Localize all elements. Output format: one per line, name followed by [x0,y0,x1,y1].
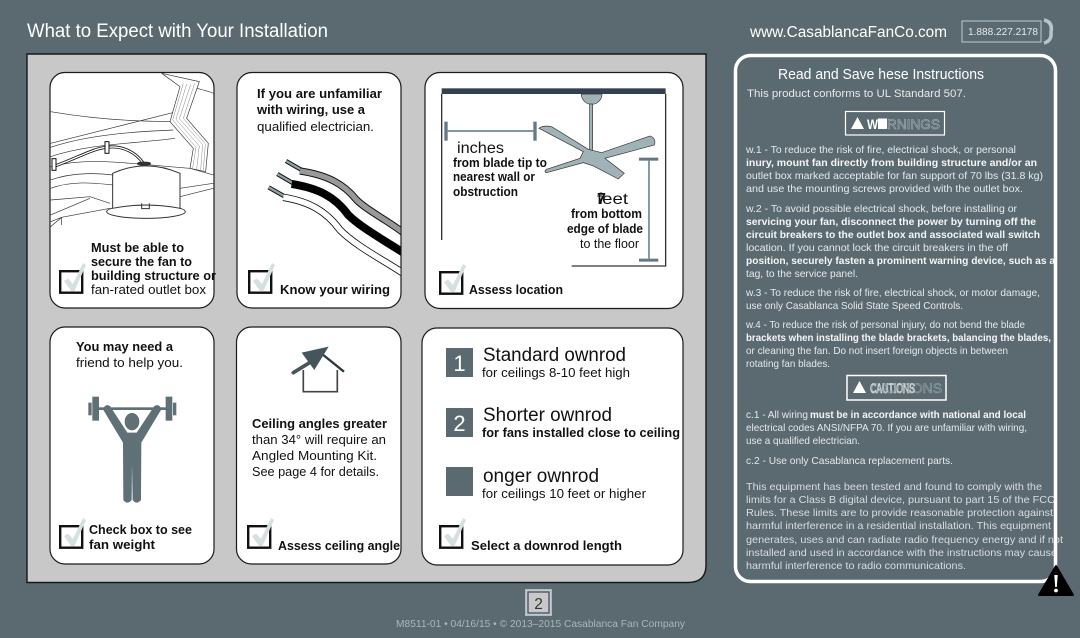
option 1: standard downrod: for ceilings 8-10 feet high [482,366,630,380]
text: may need a friend: friend to help you. [76,356,183,370]
text: inches clearance: obstruction [453,185,518,199]
caution c.1: must be in accordance with national and local [810,409,1026,421]
text: inches clearance [453,140,547,199]
phone number box [962,20,1051,43]
FCC notice [746,481,1063,572]
warning w.2: w.2 - To avoid possible electrical shock, before installing or [745,203,1018,215]
option 3: longer downrod: onger ownrod [483,466,599,487]
checkbox [248,518,274,548]
checkbox [249,263,275,293]
warning w.3 [745,287,1040,312]
text: feet clearance: edge of blade [567,222,643,236]
text: unfamiliar with wiring [256,87,382,134]
warning w.2: tag, to the service panel. [746,268,858,280]
text: ceiling angles: See page 4 for details. [252,465,379,479]
option 2: shorter downrod: 2 [453,411,466,436]
footer: M8511-01 • 04/16/15 • © 2013–2015 Casablanca Fan Company [396,618,686,630]
option 1: standard downrod [446,345,630,380]
option 2: shorter downrod: for fans installed close to ceiling [482,426,680,440]
panel: read and save instructions [736,56,1063,582]
option 3: longer downrod [446,466,646,501]
icon: warning triangle [1039,566,1073,595]
FCC notice: generates, uses and can radiate radio frequency energy and if not [746,534,1063,546]
checkbox [60,263,86,293]
warning w.1: w.1 - To reduce the risk of fire, electrical shock, or personal [745,144,1016,156]
panel: ceiling angle [236,327,401,564]
text: ceiling angles: than 34° will require an [252,433,386,447]
caution c.2: c.2 - Use only Casablanca replacement parts. [746,455,953,467]
panel: downrod length [422,328,683,565]
label: check box to see fan weight: fan weight [89,538,156,552]
warning w.2: servicing your fan, disconnect the power by turning off the [746,216,1036,228]
option 1: standard downrod: Standard ownrod [483,345,626,366]
label: assess ceiling angle: Assess ceiling angle [278,539,400,553]
warning w.1 [745,144,1043,195]
icon: house with arrow [293,347,344,392]
text: unfamiliar with wiring: with wiring, use a [256,103,366,117]
caution c.1: c.1 - All wiring [746,409,808,421]
panel border [736,56,1056,582]
page number [526,590,552,616]
panel: installation checklist [27,54,706,582]
conformance note: This product conforms to UL Standard 507. [747,88,966,100]
text: must be able to secure: Must be able to [91,241,184,255]
panel: know your wiring [237,72,403,308]
text: feet clearance: feet [597,191,629,208]
text: ceiling angles: Angled Mounting Kit. [252,449,377,463]
illustration: three wires [269,161,403,273]
FCC notice: installed and used in accordance with the instructions may cause [746,547,1057,559]
warning w.2: circuit breakers to the outlet box and associated wall switch [746,229,1040,241]
illustration: ceiling outlet box [51,73,213,227]
checkbox [440,264,466,294]
caution c.1: electrical codes ANSI/NFPA 70. If you are unfamiliar with wiring, [746,422,1027,434]
icon: weightlifter [88,397,176,503]
checkbox [60,518,86,548]
text: unfamiliar with wiring: qualified electrician. [257,120,374,134]
warning w.2: location. If you cannot lock the circuit breakers in the off [746,242,1008,254]
FCC notice: limits for a Class B digital device, pursuant to part 15 of the FCC [746,494,1055,506]
text: may need a friend [76,340,183,370]
warning w.4: w.4 - To reduce the risk of personal injury, do not bend the blade [745,319,1025,331]
FCC notice: harmful interference in a residential installation. This equipment [746,520,1051,532]
phone number box: 1.888.227.2178 [968,27,1038,38]
warning w.2 [745,203,1055,280]
warning w.2: position, securely fasten a prominent warning device, such as a [746,255,1055,267]
text: must be able to secure [91,241,216,297]
warnings badge: W [867,116,879,132]
illustration: fan clearance diagram [442,88,666,266]
option 3: longer downrod: for ceilings 10 feet or higher [482,487,646,501]
heading: Read and Save hese Instructions [778,67,984,83]
caution c.1: use a qualified electrician. [746,435,860,447]
text: may need a friend: You may need a [76,340,174,354]
panel: fan weight [50,327,214,564]
title: What to Expect with Your Installation [27,21,328,42]
checkbox [440,518,466,548]
panel: assess location [425,72,683,308]
label: assess location: Assess location [469,283,563,297]
page number: 2 [534,596,543,613]
label: select a downrod length: Select a downrod length [471,539,622,553]
warning w.3: use only Casablanca Solid State Speed Controls. [746,300,963,312]
warning w.3: w.3 - To reduce the risk of fire, electrical shock, or motor damage, [745,287,1040,299]
text: inches clearance: from blade tip to [453,156,547,170]
FCC notice: This equipment has been tested and found to comply with the [746,481,1042,493]
cautions badge [847,376,946,400]
website address: www.CasablancaFanCo.com [749,24,947,41]
warning w.1: inury, mount fan directly from building structure and/or an [746,157,1037,169]
text: must be able to secure: secure the fan to [91,255,192,269]
warning w.4: rotating fan blades. [746,358,830,370]
label: know your wiring: Know your wiring [280,283,390,297]
cautions badge: CAUTIONS [870,380,942,396]
text: must be able to secure: fan-rated outlet box [91,283,207,297]
option 1: standard downrod: 1 [453,351,466,376]
text: must be able to secure: building structure or [91,269,216,283]
warning w.4 [745,319,1051,370]
warning w.1: and use the mounting screws provided with the outlet box. [746,183,1023,195]
warning w.4: or cleaning the fan. Do not insert foreign objects in between [746,345,1008,357]
FCC notice: harmful interference to radio communications. [746,560,966,572]
warning w.1: outlet box marked acceptable for fan support of 70 lbs (31.8 kg) [746,170,1043,182]
text: ceiling angles [252,417,387,479]
warnings badge: RNINGS [887,116,940,132]
warnings badge [846,112,944,135]
text: ceiling angles: Ceiling angles greater [252,417,387,431]
text: feet clearance: from bottom [571,207,642,221]
FCC notice: Rules. These limits are to provide reasonable protection against [746,507,1053,519]
warning w.4: brackets when installing the blade brackets, balancing the blades, [746,332,1051,344]
text: inches clearance: nearest wall or [453,170,535,184]
label: check box to see fan weight [89,523,192,552]
caution c.1 [746,409,1027,447]
text: inches clearance: inches [457,140,504,157]
text: feet clearance: 7 [597,191,606,208]
text: feet clearance: to the floor [580,237,639,251]
option 2: shorter downrod [446,405,680,440]
text: feet clearance [567,191,643,251]
panel: secure the fan [50,72,216,308]
option 2: shorter downrod: Shorter ownrod [483,405,612,426]
text: unfamiliar with wiring: If you are unfamiliar [257,87,382,101]
cautions badge: CAUTIONS [870,380,915,396]
label: check box to see fan weight: Check box to see [89,523,192,537]
